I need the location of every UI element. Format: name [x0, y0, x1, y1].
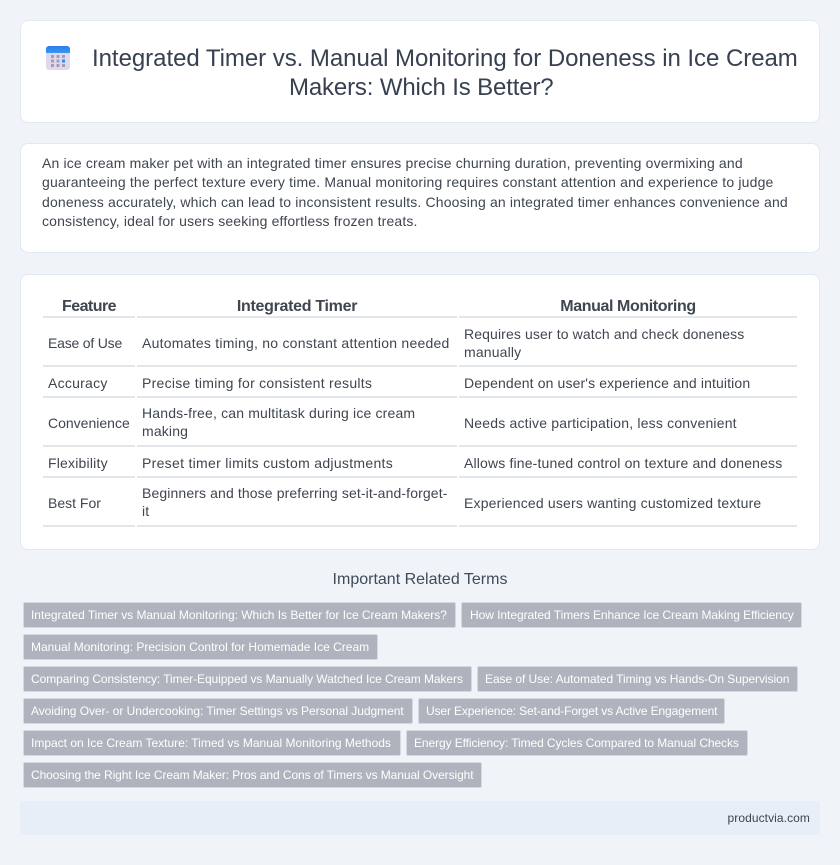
row: flexibility: Allows fine-tuned control on texture and doneness — [464, 455, 782, 471]
row: ease of use — [48, 326, 744, 360]
title — [92, 45, 798, 101]
icon: calendar — [46, 46, 70, 70]
row: accuracy: Dependent on user's experience and intuition — [464, 375, 750, 391]
row: best for — [48, 485, 761, 519]
row: convenience: making — [142, 423, 188, 439]
footer text: productvia.com — [728, 811, 810, 825]
tag: Impact on Ice Cream Texture: Timed vs Manual Monitoring Methods — [31, 736, 391, 750]
comparison table card — [20, 274, 820, 550]
heading: related terms: Important Related Terms — [333, 571, 507, 588]
row: best for: Experienced users wanting customized texture — [464, 495, 761, 511]
row: accuracy — [48, 375, 750, 391]
row: ease of use: manually — [464, 344, 521, 360]
tag — [23, 666, 472, 692]
tag: Comparing Consistency: Timer-Equipped vs Manually Watched Ice Cream Makers — [31, 672, 463, 686]
row: convenience: Needs active participation, less convenient — [464, 415, 737, 431]
tag — [418, 698, 725, 724]
tag: Choosing the Right Ice Cream Maker: Pros and Cons of Timers vs Manual Oversight — [31, 768, 474, 782]
table headers: Manual Monitoring — [560, 298, 696, 315]
tag — [461, 602, 802, 628]
header card — [20, 20, 820, 123]
description text — [42, 155, 788, 229]
description text: guaranteeing the perfect texture every time. Manual monitoring requires constant attention and experience to judge — [42, 174, 773, 190]
tag — [406, 730, 748, 756]
description card — [20, 143, 820, 253]
description text: doneness accurately, which can lead to inconsistent results. Choosing an integrated timer enhances convenience and — [42, 194, 788, 210]
tags — [23, 602, 802, 788]
row: convenience: Hands-free, can multitask during ice cream — [142, 405, 415, 421]
row: ease of use: Ease of Use — [48, 335, 122, 351]
row: convenience — [48, 405, 737, 439]
tag — [23, 602, 456, 628]
tag — [23, 730, 401, 756]
row: convenience: Convenience — [48, 415, 130, 431]
row: accuracy: Accuracy — [48, 375, 108, 391]
tag: User Experience: Set-and-Forget vs Active Engagement — [426, 704, 717, 718]
row: flexibility: Flexibility — [48, 455, 108, 471]
footer bar — [20, 801, 820, 835]
row: best for: it — [142, 503, 149, 519]
row: best for: Best For — [48, 495, 101, 511]
tag: Energy Efficiency: Timed Cycles Compared to Manual Checks — [414, 736, 739, 750]
table headers: Feature — [62, 298, 116, 315]
description text: An ice cream maker pet with an integrated timer ensures precise churning duration, preventing overmixing and — [42, 155, 743, 171]
tag: Manual Monitoring: Precision Control for Homemade Ice Cream — [31, 640, 369, 654]
table headers: Integrated Timer — [237, 298, 357, 315]
row: best for: Beginners and those preferring set-it-and-forget- — [142, 485, 448, 501]
row: flexibility: Preset timer limits custom adjustments — [142, 455, 393, 471]
tag: Avoiding Over- or Undercooking: Timer Settings vs Personal Judgment — [31, 704, 404, 718]
title: Integrated Timer vs. Manual Monitoring for Doneness in Ice Cream — [92, 45, 798, 72]
tag — [23, 634, 378, 660]
row: accuracy: Precise timing for consistent results — [142, 375, 372, 391]
tag — [477, 666, 798, 692]
table headers — [62, 298, 696, 315]
tag — [23, 762, 482, 788]
tag — [23, 698, 413, 724]
row: flexibility — [48, 455, 782, 471]
row: ease of use: Automates timing, no constant attention needed — [142, 335, 450, 351]
title: Makers: Which Is Better? — [289, 74, 553, 101]
tag: Integrated Timer vs Manual Monitoring: Which Is Better for Ice Cream Makers? — [31, 608, 447, 622]
tag: Ease of Use: Automated Timing vs Hands-On Supervision — [485, 672, 789, 686]
tag: How Integrated Timers Enhance Ice Cream Making Efficiency — [470, 608, 794, 622]
description text: consistency, ideal for users seeking effortless frozen treats. — [42, 213, 418, 229]
row: ease of use: Requires user to watch and check doneness — [464, 326, 744, 342]
